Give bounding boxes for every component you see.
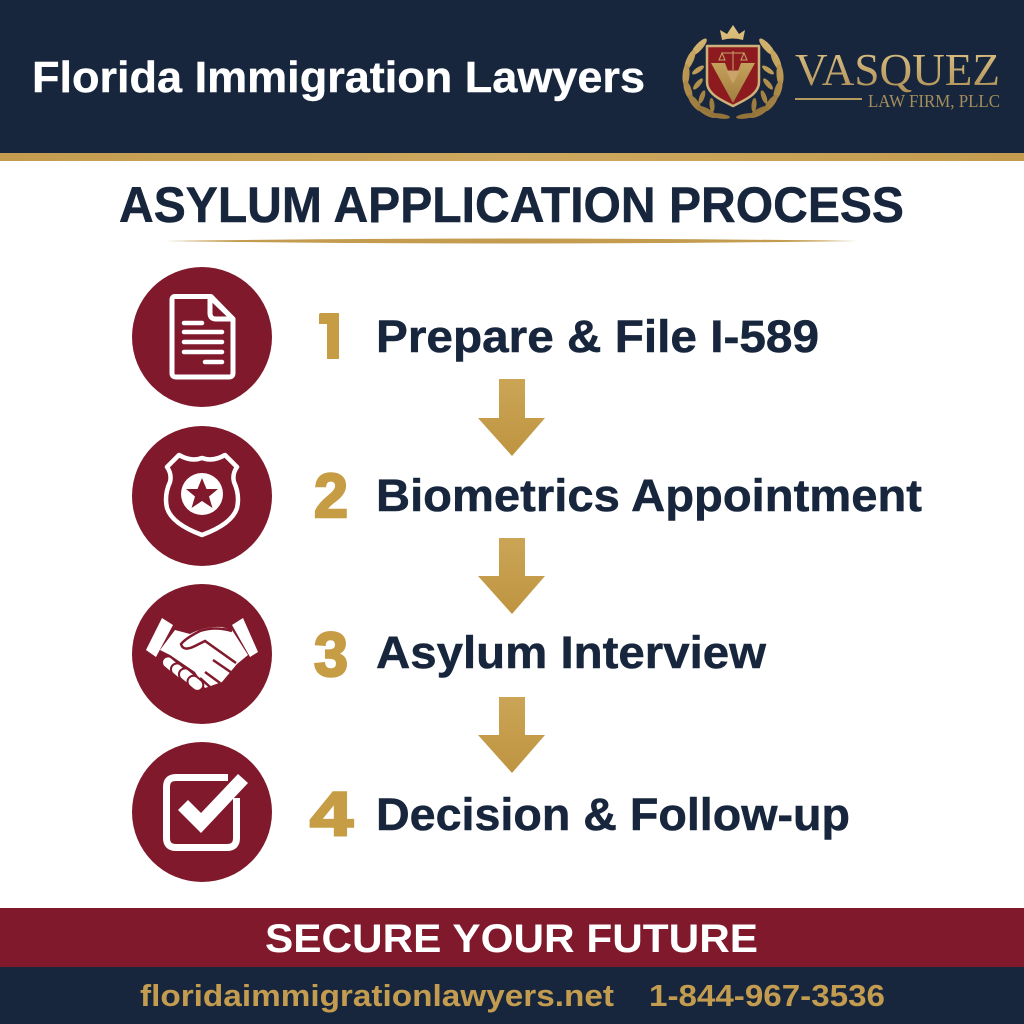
icon: checkbox <box>132 742 272 882</box>
number 3: 3 <box>314 621 348 690</box>
logo subtitle: LAW FIRM, PLLC <box>868 91 1000 111</box>
step 2 label: Biometrics Appointment <box>376 470 922 521</box>
step 4 label: Decision & Follow-up <box>376 789 850 840</box>
arrow 2 to 3 <box>478 538 545 614</box>
call-to-action banner <box>0 908 1024 967</box>
arrow 3 to 4 <box>478 697 545 773</box>
number 4: 4 <box>310 780 354 849</box>
arrow 1 to 2 <box>478 379 545 456</box>
header title: Florida Immigration Lawyers <box>32 53 645 102</box>
website: floridaimmigrationlawyers.net <box>140 978 614 1013</box>
icon: shield <box>707 46 759 106</box>
icon: badge <box>132 426 272 566</box>
step 1 label: Prepare & File I-589 <box>376 311 819 362</box>
main heading: ASYLUM APPLICATION PROCESS <box>119 177 904 233</box>
step 3 <box>132 584 767 724</box>
icon: handshake <box>132 584 272 724</box>
logo wordmark: VASQUEZ <box>795 45 1000 95</box>
footer <box>0 967 1024 1024</box>
icon: right laurel <box>736 36 784 120</box>
icon: document <box>132 267 272 407</box>
number 1: 1 <box>313 299 350 373</box>
icon: crown <box>720 25 745 40</box>
step 4 <box>132 742 850 882</box>
heading underline <box>165 238 858 244</box>
step 2 <box>132 426 922 566</box>
icon: scales and pillars <box>719 51 747 83</box>
icon: V mark <box>711 63 755 103</box>
step 1 <box>132 267 819 407</box>
phone number: 1-844-967-3536 <box>649 978 885 1013</box>
logo rule <box>795 98 862 100</box>
number 2: 2 <box>314 462 348 531</box>
step 3 label: Asylum Interview <box>376 627 767 678</box>
logo: Vasquez Law Firm <box>682 25 1000 120</box>
icon: left laurel <box>682 36 730 120</box>
banner text: SECURE YOUR FUTURE <box>265 917 758 961</box>
header band <box>0 0 1024 161</box>
